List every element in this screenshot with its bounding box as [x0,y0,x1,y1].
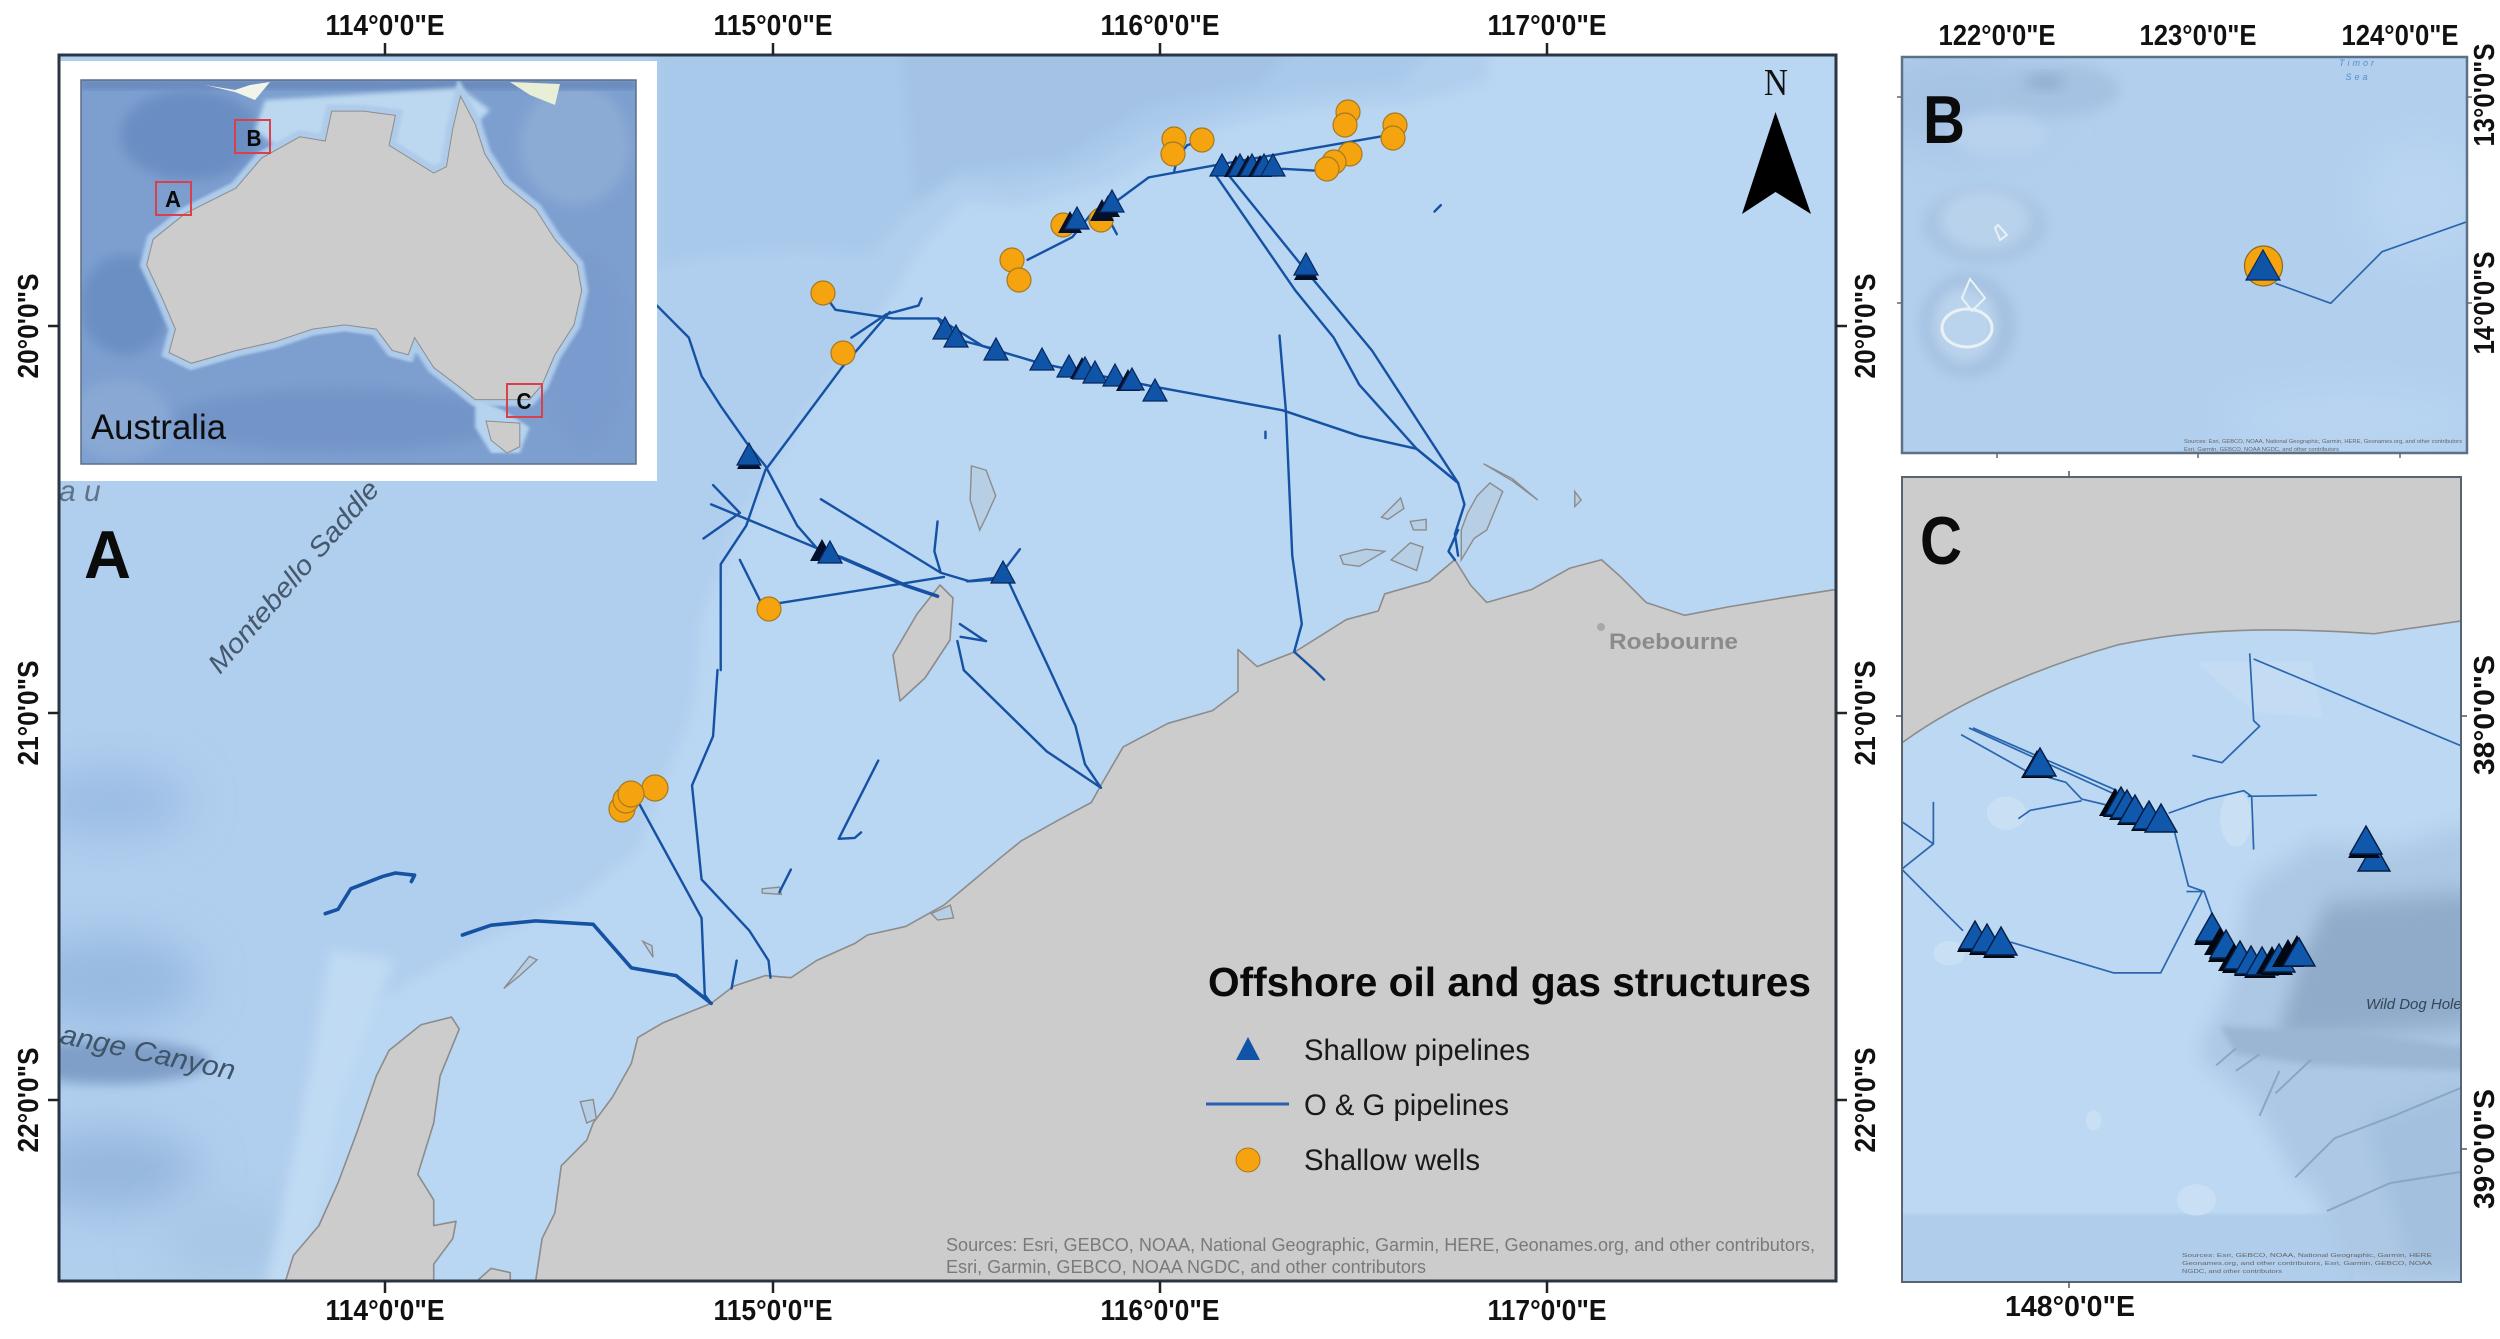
structures C [1957,748,2390,978]
coordinates for panel A: 117°0'0"E [1488,10,1606,42]
place label: Montebello Saddle: Montebello Saddle [202,474,385,679]
panel A: main map of north-west shelf [10,10,1913,1327]
attribution C [2182,1253,2432,1275]
islands south of the gulf [504,887,954,1123]
place label: Canyon: ange Canyon [58,1019,238,1086]
coordinates for panel A: 116°0'0"E [1100,1295,1220,1327]
Montebello and Dampier islands [970,464,1581,571]
land C [1902,477,2461,743]
coordinates for panel A: 114°0'0"E [326,10,444,42]
coordinates for panel A: 115°0'0"E [714,1295,832,1327]
sources credit: Esri, Garmin, GEBCO, NOAA NGDC, and other contributors [946,1257,1426,1277]
coordinates for panel A: 20°0'0"S [1850,274,1882,378]
shallow wells [609,100,1407,822]
well and structure B [2244,246,2282,286]
seabed relief B [1870,50,2480,450]
attribution C: Geonames.org, and other contributors, Esri, Garmin, GEBCO, NOAA [2182,1261,2432,1267]
coordinates for panel A: 117°0'0"E [1488,1295,1606,1327]
legend item: shallow pipelines [1236,1037,1529,1066]
place label fragment: a u [59,475,101,508]
shallow pipeline structures [737,154,1318,583]
inset: box B: B [246,125,262,151]
frame C [1902,477,2461,1282]
legend item: shallow wells [1236,1148,1479,1172]
sources credit: Sources: Esri, GEBCO, NOAA, National Geographic, Garmin, HERE, Geonames.org, and other contributors, [946,1235,1815,1255]
inset: box C [507,384,542,417]
frame B [1902,57,2467,453]
inset: box B [235,120,270,153]
coordinates for panel A: 115°0'0"E [714,10,832,42]
legend [1206,959,1811,1177]
coordinates for panel A: 22°0'0"S [1850,1048,1882,1152]
place label: Roebourne: Roebourne [1609,629,1738,654]
coordinates for panel C: 148°0'0"E [2005,1291,2135,1323]
place label Wild Dog Hole: Wild Dog Hole [2366,996,2462,1013]
coordinates for panel B: 124°0'0"E [2342,20,2458,52]
legend: Offshore oil and gas structures [1208,959,1811,1005]
coordinates for panel B [1897,20,2500,458]
legend item: shallow wells: Shallow wells [1304,1144,1480,1177]
inset: box A [156,182,191,215]
pipelines: south [325,670,878,1003]
attribution C: Sources: Esri, GEBCO, NOAA, National Geographic, Garmin, HERE [2182,1253,2432,1259]
attribution B: Esri, Garmin, GEBCO, NOAA NGDC, and other contributors [2184,447,2339,453]
inset: Australia locator map [59,61,657,481]
coordinates for panel A: 20°0'0"S [13,274,45,378]
north arrow: N [1764,62,1788,104]
panel C: Bass Strait map [1896,471,2500,1323]
inset: box C: C [516,388,532,414]
land: Western Australia coast [286,560,1913,1311]
north arrow [1742,62,1811,214]
panel letter A: A [84,517,131,593]
place label Timor Sea: Timor [2339,58,2377,68]
coordinates for panel A: 21°0'0"S [1850,660,1882,766]
coordinates for panel B: 122°0'0"E [1938,20,2056,52]
panel letter C: C [1920,503,1962,579]
attribution B [2184,439,2462,453]
pipeline B [2275,222,2467,303]
inset: Australia and Tasmania [147,96,582,453]
attribution C: NGDC, and other contributors [2182,1269,2282,1275]
place label: Roebourne [1597,623,1738,649]
pipelines C [1902,653,2461,973]
seabed relief C [1902,662,2473,1290]
frame A [59,55,1836,1281]
pipelines: north and west [657,293,1000,670]
coordinates for panel A: 114°0'0"E [326,1295,444,1327]
coordinates for panel A: 116°0'0"E [1100,10,1220,42]
panel letter B: B [1923,82,1965,158]
place label Timor Sea: Sea [2345,72,2371,82]
coordinates for panel C [1896,471,2500,1323]
coordinates for panel A: 21°0'0"S [13,660,45,766]
inset label: Australia: Australia [91,408,227,447]
pipelines: north-east to Burrup [938,135,1464,788]
sources credit [946,1235,1815,1277]
Barrow Island [893,585,953,701]
inset ocean relief [70,80,636,460]
coordinates for panel A [13,10,1882,1327]
attribution B: Sources: Esri, GEBCO, NOAA, National Geographic, Garmin, HERE, Geonames.org, and other contributors [2184,439,2462,445]
atolls B [1942,225,2007,347]
inset: box A: A [165,186,181,212]
sea background [10,40,1836,1300]
panel B: Browse basin map [1870,20,2500,458]
legend item: shallow pipelines: Shallow pipelines [1304,1034,1530,1067]
place label Timor Sea [2339,58,2377,82]
coordinates for panel A: 22°0'0"S [13,1048,45,1152]
coordinates for panel B: 123°0'0"E [2140,20,2256,52]
legend item: O and G pipelines: O & G pipelines [1304,1089,1509,1122]
